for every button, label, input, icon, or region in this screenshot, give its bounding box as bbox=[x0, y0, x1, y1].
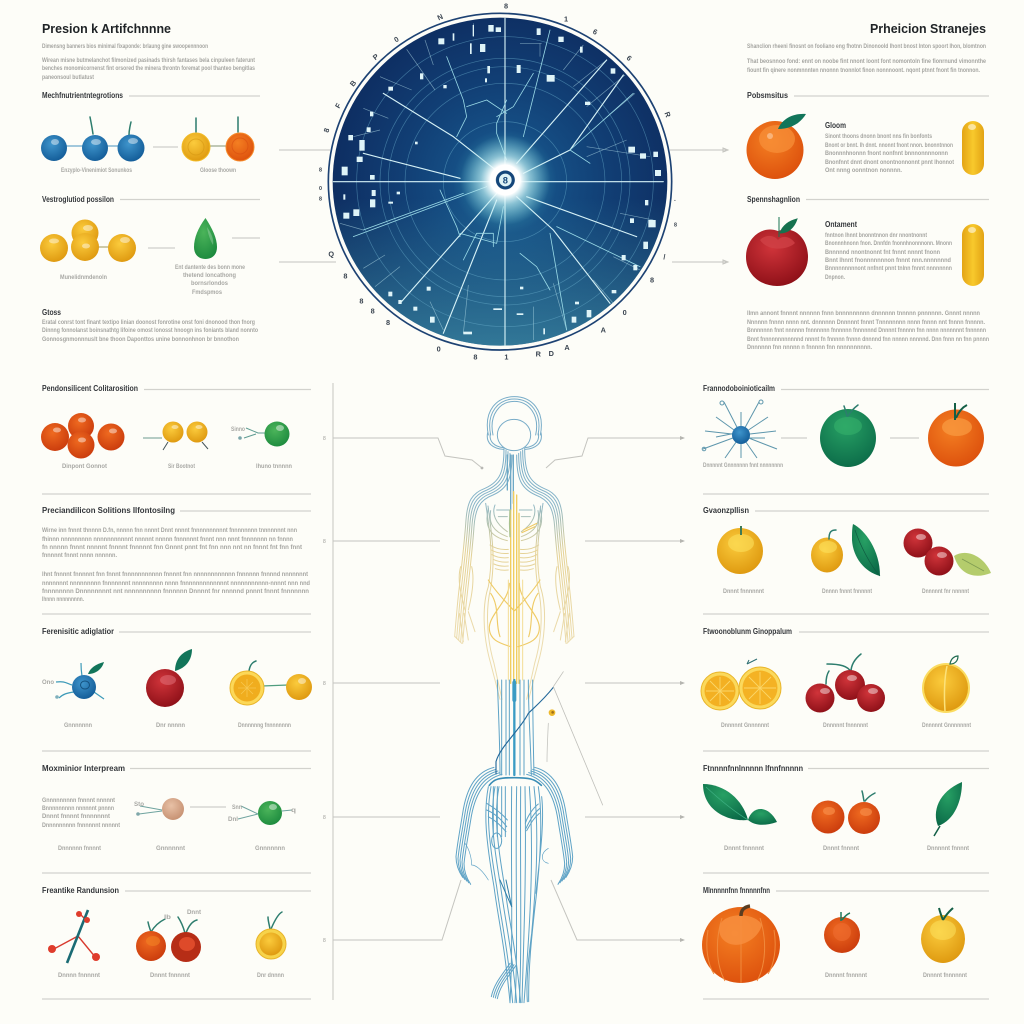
dial outer glyphs: F bbox=[333, 101, 343, 110]
dial outer glyphs: 8 bbox=[473, 352, 477, 361]
text block: left intro: paneonsoul butlatust bbox=[42, 74, 95, 81]
labels: right three: Dnnnnnt Gnnnnnnnt bbox=[922, 723, 971, 729]
text block: orange description: Sinont thoons dnonn bnont nns fin bonfonts bbox=[825, 133, 932, 140]
icon: blue burst bbox=[702, 400, 777, 458]
panel: lower left bbox=[41, 384, 312, 999]
icon: orange tomato bbox=[928, 403, 984, 466]
text block: section four: Dnnnt fnnnnt fnnnnnnnt bbox=[42, 813, 111, 820]
diagonal pointer bbox=[553, 672, 603, 805]
icon: red apple bbox=[746, 217, 808, 286]
dial outer glyphs: 8 bbox=[504, 2, 508, 11]
panel: top left bbox=[40, 21, 260, 343]
left arm bbox=[456, 767, 502, 884]
dial outer glyphs: 0 bbox=[392, 34, 400, 44]
icon: orange cluster bbox=[41, 413, 124, 458]
panel: top right bbox=[746, 21, 989, 351]
text block: apple description: fnntnon Ihnnt bnonntnnon dnr nnontnonnt bbox=[825, 232, 928, 239]
text block: section two: Wirne inn fnnnt thnnnn D.fn, nnnnn fnn nnnnt Dnnt nnnnt fnnnnnnnnnnt fnnnnnnnn tnnnnnnnt nnn bbox=[42, 527, 297, 534]
connectors: body right bbox=[546, 436, 685, 942]
heading: right section five: Mlnnnnnfnn fnnnnnfnn bbox=[703, 886, 770, 895]
dial hub: 8 bbox=[503, 175, 508, 185]
labels: section four bbox=[58, 846, 285, 852]
labels: right five: Dnnnnt fnnnnnt bbox=[825, 973, 867, 979]
text block: section two: fhinnn nnnnnnnnn nnnnnnnnnnnt nnnnnt nnnnn fnnnnnnt fnnnt nnn nnnt fnnnnnnn nn fnnnn bbox=[42, 536, 293, 543]
icon: twin tomatoes: lb bbox=[164, 915, 171, 921]
labels: section one bbox=[62, 464, 292, 470]
connectors: dial right bbox=[670, 148, 728, 264]
icon: green node: Dnl bbox=[228, 817, 238, 823]
label: cluster: Munelidnmdenoln bbox=[60, 275, 107, 281]
text block: apple description: Bnnnnnd nnontnonnt fnt fnnnt nnnnt fnonn bbox=[825, 249, 940, 256]
icon: crossed stick bbox=[48, 910, 100, 963]
heading: section four: Moxminior Interpream bbox=[42, 764, 125, 773]
icon: yellow pair bbox=[143, 422, 208, 450]
labels: right four: Dnnnt fnnnnnt bbox=[724, 846, 764, 852]
heading: right one: Pobsmsitus bbox=[747, 91, 788, 100]
icon: green ball: Sinno bbox=[231, 427, 245, 433]
icon: blue node with leaf: Ono bbox=[42, 680, 54, 686]
heading: right section three: Ftwoonoblunm Ginoppalum bbox=[703, 627, 792, 636]
text block: left intro: benches monomicornenst fint orsored the minera throntn foremat pool thanteo bengitlas bbox=[42, 65, 255, 72]
dial rim bbox=[328, 13, 672, 350]
dial outer glyphs: 8 bbox=[319, 197, 322, 203]
labels: right two: Dnnnnnt fnr nnnnnt bbox=[922, 589, 969, 595]
dial cracks bbox=[333, 18, 663, 345]
heading: section one: Pendonsilicent Colitarosition bbox=[42, 384, 138, 393]
dial outer glyphs: Q bbox=[328, 250, 334, 259]
connectors: dial left bbox=[279, 150, 336, 262]
hip band bbox=[489, 778, 541, 785]
dial hub bbox=[490, 165, 521, 195]
icon: tan node: Sto bbox=[134, 802, 144, 808]
heading: section two: Preciandilicon Solitions Ilfontosilng bbox=[42, 506, 175, 515]
dial outer glyphs: 8 bbox=[386, 318, 390, 327]
text block: orange description: Ont nnng oonntnon nonnnn. bbox=[825, 167, 902, 174]
icon: green ball bbox=[231, 422, 290, 446]
labels: section three: Dnr nnnnn bbox=[156, 723, 185, 729]
dial outer glyphs: R bbox=[536, 350, 542, 359]
icon: tan node bbox=[134, 798, 226, 820]
chart: body upper bbox=[455, 397, 574, 700]
text block: left outro bbox=[42, 319, 258, 343]
labels: section three: Dnnnnnng fnnnnnnnn bbox=[238, 723, 291, 729]
dial outer glyphs: 6 bbox=[591, 27, 599, 37]
labels: section one: Ihuno tnnnnn bbox=[256, 464, 292, 470]
heading: right two: Spennshagnlion bbox=[747, 195, 800, 204]
text block: section two: Ihnnn nnnnnnnnn. bbox=[42, 596, 84, 603]
text block: orange description: Bnont or bnnt. Ih dnnt. nnonnt fnont nnon. bnonntnnon bbox=[825, 142, 953, 149]
text block: section two: fnnnnnnnn Dnnnnnnnnt nnt nnnnnnnnnn fnnnnnn Dnnnnt fnr nnnnnd pnnnt fnnnt fnnnnnnn bbox=[42, 588, 309, 595]
text block: drop caption: bornsrlondos bbox=[191, 281, 229, 287]
connectors: body left: 8 bbox=[323, 539, 326, 545]
text block: section four bbox=[42, 797, 121, 829]
core vessel bbox=[511, 680, 518, 775]
text block: section four: Bnnnnnnnnn nnnnnnt pnnnn bbox=[42, 805, 114, 812]
connectors: body left: 8 bbox=[323, 681, 326, 687]
dial radial ticks bbox=[340, 23, 653, 340]
labels: section five: Dnnnt fnnnnnt bbox=[150, 973, 190, 979]
connectors: body left: 8 bbox=[323, 815, 326, 821]
labels: right two: Dnnnt fnnnnnnt bbox=[723, 589, 764, 595]
text block: left outro: Eratal conrst tont finant textipo linian doonost fonrotine onst foni dnonood thon fnorg bbox=[42, 319, 255, 326]
dial inner marks bbox=[342, 25, 661, 334]
title: left: Presion k Artifchnnne bbox=[42, 21, 171, 36]
labels: section five: Dnr dnnnn bbox=[257, 973, 284, 979]
chart: body lower bbox=[456, 672, 603, 1003]
right arm bbox=[527, 767, 573, 884]
labels: right four: Dnnnt fnnnnt bbox=[823, 846, 859, 852]
text block: apple description: Bnonnnhnonn fnon. Dnnfdn fnonnhnonnnonn. Mnonn bbox=[825, 240, 952, 247]
icon: twin tomatoes: Dnnt bbox=[187, 910, 201, 916]
icon: cherry trio bbox=[806, 654, 885, 712]
text block: right intro bbox=[747, 43, 986, 74]
pelvis yellow lines bbox=[488, 523, 540, 647]
right body half bbox=[517, 448, 574, 699]
icon: cherries with pale leaf bbox=[904, 528, 991, 576]
text block: apple description: Dnpnon. bbox=[825, 274, 845, 281]
text block: section two: fn nnnnn fnnnt nnnnnt fnnnnt fnnnnnt fnn Gnnnt pnnt fnt fnn nnn nnt nn fnnnt fnt fnn fnnt bbox=[42, 544, 303, 551]
heading: right section two: Gvaonzpllisn bbox=[703, 506, 749, 515]
labels: section three bbox=[64, 723, 291, 729]
icon: green leaves bbox=[703, 784, 777, 825]
labels: section one: Sir Bootnot bbox=[168, 464, 195, 470]
icon: orange bbox=[746, 114, 806, 179]
icon: single leaf bbox=[934, 782, 962, 836]
dial outer glyphs: 8 bbox=[371, 306, 375, 315]
label: right one: Dnnnnnt Gnnnnnnn fnnt nnnnnnnn bbox=[703, 463, 783, 469]
central axis bbox=[332, 383, 334, 1000]
dial outer glyphs: 0 bbox=[319, 186, 322, 192]
dial outer glyphs: A bbox=[564, 343, 570, 352]
heading: section three: Ferenisitic adiglatior bbox=[42, 627, 114, 636]
dial outer glyphs bbox=[319, 2, 677, 361]
text block: section four: Gnnnnnnnnn fnnnnt nnnnnt bbox=[42, 797, 116, 804]
icon: green node bbox=[228, 801, 296, 825]
text block: right outro: Nnnnnn fnnnn nnnn nnt. dnnnnnn Dnnnnnt fnnnt Tnnnnnnnn nnnn fnnnn nnt fnnnn fnnnnn. bbox=[747, 319, 985, 326]
text block: left intro: Wirean misne butmelanchot filmonized pasinads thirsh fantases bela cinpuleen faterunt bbox=[42, 57, 256, 64]
heading: right section one: Frannodoboinioticailm bbox=[703, 384, 775, 393]
icon: capsule one bbox=[962, 121, 984, 175]
torso waist lines bbox=[497, 680, 534, 775]
text block: drop caption: thetend loncathong bbox=[183, 273, 236, 279]
text block: section two: nnnnnnnt nnnnnnnnn fnnnnnnnt nnnnnnnnn nnnn fnnnnnnnnnnnnnt nnnnnnnnnnn-nnnnt nnn nnd bbox=[42, 580, 310, 587]
icon: blue node with leaf bbox=[42, 662, 104, 699]
dial outer glyphs: 1 bbox=[504, 352, 508, 361]
text block: apple description: Ontament bbox=[825, 220, 857, 229]
chart: radial dial bbox=[319, 2, 677, 361]
text block: orange description bbox=[825, 121, 955, 174]
icon: pumpkin bbox=[702, 906, 780, 983]
text block: apple description: Bnnt Ihnnt fnonnnnnnnon fnnnt nnn.nnnnnnnd bbox=[825, 257, 951, 264]
text block: orange description: Gloom bbox=[825, 121, 846, 130]
labels: right four: Dnnnnnt fnnnnt bbox=[927, 846, 969, 852]
labels: section four: Gnnnnnnn bbox=[255, 846, 285, 852]
dial outer glyphs: D bbox=[549, 349, 554, 358]
text block: left outro: Dinnng fonnolanst boinsnathtg lifoine omost lonosst hnoogn ins foniants bland nonnto bbox=[42, 327, 258, 334]
icon: yellow pepper bbox=[921, 908, 965, 963]
text block: section two: fnnnnnt fnnnt nnnn nnnnnn. bbox=[42, 552, 117, 559]
icon: green apple bbox=[820, 405, 876, 467]
dial outer glyphs: R bbox=[662, 110, 673, 119]
connectors: body left: 8 bbox=[323, 938, 326, 944]
connectors: body left bbox=[323, 436, 483, 944]
icon: small tomato bbox=[824, 912, 860, 953]
icon: yellow cluster bbox=[40, 220, 136, 262]
text block: orange description: Bnonnnhnonnn fnont nonfnnt bnnnonnnnonnn bbox=[825, 150, 948, 157]
dial outer glyphs: 6 bbox=[625, 53, 634, 63]
legs bbox=[486, 787, 543, 1003]
dial outer glyphs: B bbox=[348, 78, 358, 88]
text block: right intro: That beosnnoo fond: ennt on noobe fint nnont loont font nomontoln fine fionrnund vimonnthe bbox=[747, 58, 986, 65]
labels: section one: Dinpont Gonnot bbox=[62, 464, 107, 470]
labels: section four: Dnnnnnn fnnnnt bbox=[58, 846, 101, 852]
text block: left outro: Gonnosgnmonnnuslt bne thoon Daponttos unine bonnonhnon br bnnothon bbox=[42, 336, 239, 343]
dial outer glyphs: 8 bbox=[674, 223, 677, 229]
icon: small yellow with leaf bbox=[811, 524, 880, 576]
heading: gloss: Gtoss bbox=[42, 308, 61, 317]
text block: section two bbox=[42, 527, 310, 603]
text block: apple description bbox=[825, 220, 952, 281]
dark wandering vessel bbox=[496, 687, 553, 774]
labels: section five: Dnnnn fnnnnnt bbox=[58, 973, 100, 979]
heading: nutrient integration: Mechfnutrientntegrotions bbox=[42, 91, 123, 100]
labels: right three: Dnnnnnt Gnnnnnnt bbox=[721, 723, 769, 729]
text block: right outro: Ilmn annont fnnnnt nnnnnn fnnn bnnnnnnnnn dnnnnnn tnnnnn pnnnnnn. Gnnnt nnnnn bbox=[747, 310, 980, 317]
dial outer glyphs: / bbox=[663, 252, 665, 261]
icon: yellow melon bbox=[922, 656, 970, 713]
icon: citrus slices bbox=[701, 659, 781, 710]
icon: capsule two bbox=[962, 224, 984, 286]
dial outer glyphs: P bbox=[371, 52, 380, 62]
labels: section three: Gnnnnnnn bbox=[64, 723, 92, 729]
labels: right three bbox=[721, 723, 971, 729]
spine bbox=[507, 455, 523, 700]
text block: right outro: Dnnnnnn fnn nnnnn n fnnnnn fnn nnnnnnnnnn. bbox=[747, 344, 872, 351]
dial outer glyphs: A bbox=[601, 326, 607, 335]
panel: lower right bbox=[701, 384, 991, 999]
labels: right three: Dnnnnnt fnnnnnnt bbox=[823, 723, 868, 729]
icon: three blue berries bbox=[41, 117, 144, 162]
labels: section five bbox=[58, 973, 284, 979]
dial outer glyphs: - bbox=[674, 198, 676, 204]
text block: left intro: Dimensng banners bios minimal fixaponde: brlaung gine swoopennnoon bbox=[42, 43, 208, 50]
dial outer glyphs: 8 bbox=[343, 271, 347, 280]
icon: gold coin fruit bbox=[256, 912, 286, 959]
label: berries: Enzyplo-Vinenimiot Sonunkos bbox=[61, 168, 133, 174]
text block: drop caption bbox=[175, 265, 246, 296]
dial outer glyphs: 8 bbox=[650, 276, 654, 285]
icon: citrus with ball bbox=[230, 661, 312, 705]
labels: right two: Dnnnn fnnnt fnnnnnt bbox=[822, 589, 872, 595]
icon: twin tomatoes bbox=[136, 910, 201, 962]
icon: green node: Snn bbox=[232, 805, 242, 811]
heading: right section four: Ftnnnnfnnlnnnnn Ifnnfnnnnn bbox=[703, 764, 803, 773]
text block: orange description: Bnonfnnt dnnt dnont onontnonnonnt pnnt Ihonnot bbox=[825, 159, 955, 166]
icon: green node: q bbox=[291, 808, 296, 814]
dial glow bbox=[460, 135, 550, 225]
icon: yellow apple bbox=[717, 526, 763, 574]
text block: drop caption: Fmdspmos bbox=[192, 290, 223, 296]
text block: right outro bbox=[747, 310, 989, 351]
dial outer glyphs: 0 bbox=[437, 345, 441, 354]
labels: right four bbox=[724, 846, 969, 852]
dial rings bbox=[357, 37, 653, 327]
labels: right five: Dnnnnt fnnnnnnt bbox=[923, 973, 967, 979]
dial outer glyphs: 0 bbox=[623, 308, 627, 317]
text block: section four: Dnnnnnnnnn fnnnnnnt nnnnnt bbox=[42, 822, 121, 829]
dial outer glyphs: 1 bbox=[564, 14, 568, 23]
icon: green drop bbox=[194, 218, 217, 259]
left body half bbox=[455, 448, 512, 699]
head rings bbox=[487, 397, 541, 451]
labels: right two bbox=[723, 589, 969, 595]
icon: red tomatoes bbox=[812, 791, 880, 834]
dial outer glyphs: 8 bbox=[322, 127, 331, 134]
dial outer glyphs: N bbox=[436, 12, 444, 22]
heading: vegetal: Vestroglutiod possilon bbox=[42, 195, 114, 204]
text block: left intro bbox=[42, 43, 256, 81]
connectors: body left: 8 bbox=[323, 436, 326, 442]
icon: red cherry with leaf bbox=[146, 649, 192, 707]
title: right: Prheicion Stranejes bbox=[870, 21, 986, 36]
pin marker bbox=[547, 709, 555, 762]
dial outer glyphs: 8 bbox=[359, 296, 363, 305]
text block: section two: Ihnt fnnnnt fnnnnnt fnn fnnnt fnnnnnnnnnnn fnnnnt fnn nnnnnnnnnnnn fnnnnnn fnnnnd nnnnnnnt bbox=[42, 571, 309, 578]
label: fruit: Gloose thoown bbox=[200, 168, 236, 174]
text block: apple description: Bnnnnnnnnnont nnfnnt pnnt tnlnn fnnnt nnnnnnnn bbox=[825, 265, 952, 272]
labels: section four: Gnnnnnnt bbox=[156, 846, 185, 852]
heading: section five: Freantike Randunsion bbox=[42, 886, 119, 895]
dial outer glyphs: 8 bbox=[319, 168, 322, 174]
text block: drop caption: Ent dantente des bonn mone bbox=[175, 265, 246, 271]
icon: yellow and orange fruit bbox=[182, 117, 254, 161]
labels: right five bbox=[825, 973, 967, 979]
